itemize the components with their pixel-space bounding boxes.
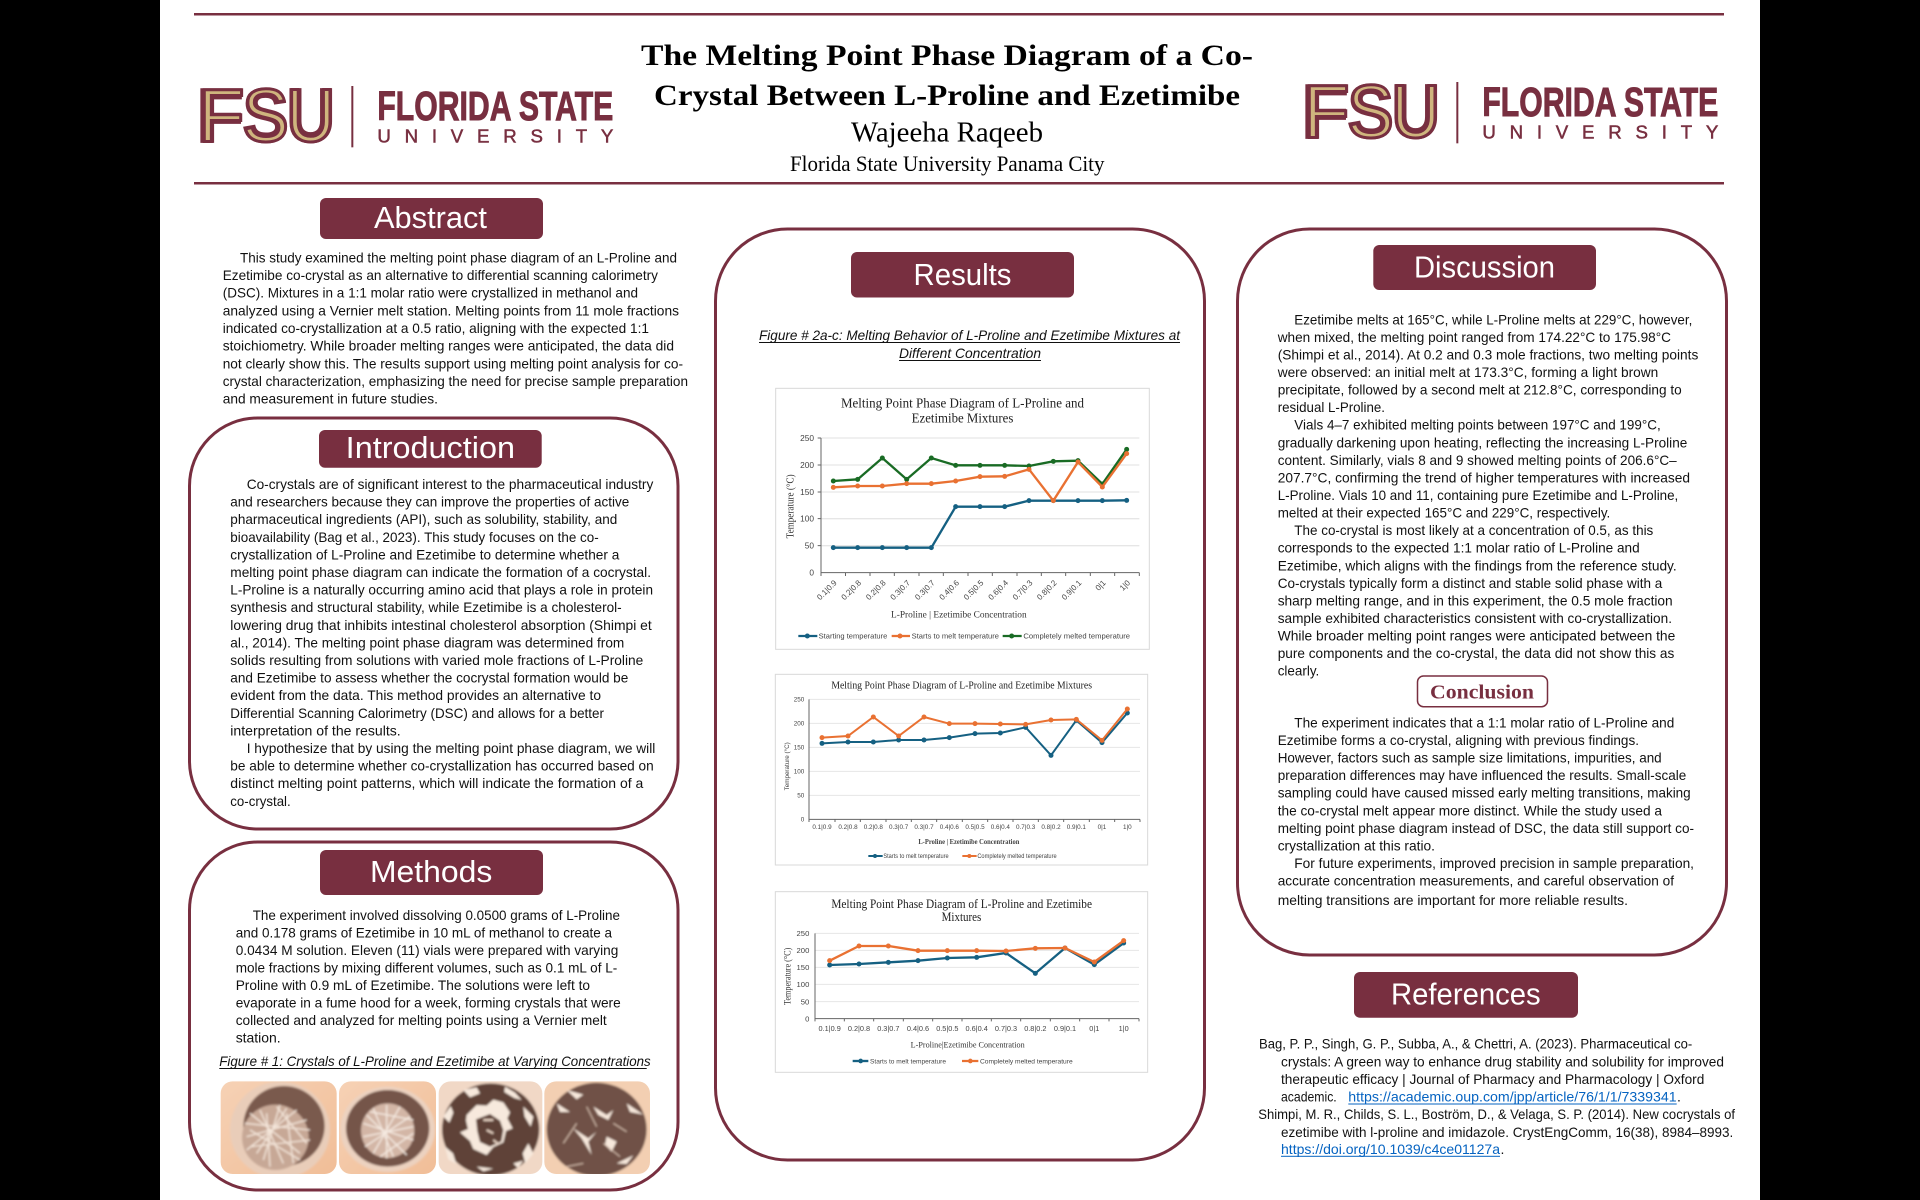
legend: Completely melted temperature — [977, 854, 1057, 860]
text: discussion body: Co-crystals typically form a distinct and stable solid phase with a — [1278, 575, 1662, 591]
text: introduction body: and Ezetimibe to assess whether the cocrystal formation would be — [230, 670, 628, 686]
text: discussion body: While broader melting point ranges were anticipated between the — [1278, 628, 1675, 644]
text: references list: Bag, P. P., Singh, G. P., Subba, A., & Chettri, A. (2023). Pharmaceutical co- — [1259, 1036, 1693, 1052]
text: discussion body: The co-crystal is most likely at a concentration of 0.5, as this — [1294, 522, 1653, 538]
logo: FSU Florida State University, right: FLORIDA STATE — [1482, 79, 1718, 125]
logo: FSU Florida State University, right: S — [1348, 70, 1394, 154]
text: conclusion body: accurate concentration measurements, and careful observation of — [1278, 873, 1674, 889]
x axis labels: 1|0 — [1119, 1024, 1129, 1033]
text: references list: academic. — [1281, 1089, 1337, 1105]
x axis labels: 0.3|0.7 — [913, 578, 937, 602]
heading: Conclusion — [1418, 676, 1548, 707]
legend: Starts to melt temperature — [870, 1058, 946, 1065]
x axis labels: 0.3|0.7 — [889, 824, 909, 831]
series: starting temperature — [833, 500, 1127, 548]
text: methods body: mole fractions by mixing different volumes, such as 0.1 mL of L- — [236, 960, 618, 976]
x axis labels: 0.3|0.7 — [914, 824, 934, 831]
text: introduction body: bioavailability (Bag et al., 2023). This study focuses on the co- — [230, 529, 599, 545]
x axis title: L-Proline | Ezetimibe Concentration — [918, 837, 1020, 846]
text: conclusion body: However, factors such as sample size limitations, impurities, and — [1278, 750, 1662, 766]
y axis title: Temperature (°C) — [785, 474, 796, 538]
text: abstract body — [223, 250, 688, 407]
x axis labels: 0.4|0.6 — [940, 824, 959, 831]
x axis labels: 0.4|0.6 — [938, 578, 961, 602]
black side margin: right — [1760, 0, 1920, 1200]
author name: Wajeeha Raqeeb — [851, 117, 1043, 149]
logo: FSU Florida State University, right: F — [1302, 70, 1348, 154]
x axis labels: 0.1|0.9 — [819, 1024, 841, 1033]
text: abstract body: crystal characterization, emphasizing the need for precise sample preparation — [223, 373, 688, 389]
text: discussion body: melted at their expected 165°C and 229°C, respectively. — [1278, 505, 1610, 521]
series: starts to melt temperature — [833, 454, 1127, 501]
x axis labels: 0.7|0.3 — [1016, 824, 1036, 831]
black side margin: left — [0, 0, 160, 1200]
chart title: Ezetimibe Mixtures — [912, 411, 1013, 426]
heading: Conclusion: Conclusion — [1430, 681, 1534, 703]
text: methods body: collected and analyzed for melting points using a Vernier melt — [236, 1012, 607, 1028]
logo: FSU Florida State University, right: U — [1392, 70, 1440, 154]
y axis labels: 200 — [797, 946, 809, 955]
y axis labels: 100 — [797, 980, 809, 989]
text: introduction body: evident from the data. This method provides an alternative to — [230, 687, 601, 703]
legend — [868, 854, 1057, 860]
heading: Discussion: Discussion — [1414, 250, 1555, 285]
text: discussion body: precipitate, followed by a second melt at 212.8°C, corresponding to — [1278, 382, 1682, 398]
y axis labels: 0 — [801, 817, 805, 824]
series: completely melted temperature — [833, 449, 1127, 484]
x axis labels — [819, 1024, 1129, 1033]
text: introduction body — [230, 476, 655, 809]
chart title: Mixtures — [942, 910, 982, 924]
text: abstract body: analyzed using a Vernier melt station. Melting points from 11 mole fractions — [223, 302, 679, 318]
logo: FSU Florida State University, left: U — [287, 74, 335, 158]
text: methods body — [236, 907, 621, 1046]
panel: Introduction — [190, 418, 678, 829]
text: references list: https://doi.org/10.1039/c4ce01127a — [1281, 1141, 1500, 1157]
logo: FSU Florida State University, right — [1302, 70, 1719, 154]
text: introduction body: L-Proline is a naturally occurring amino acid that plays a role in protein — [230, 582, 653, 598]
heading: Discussion — [1373, 245, 1596, 290]
logo: FSU Florida State University, left: S — [243, 74, 289, 158]
text: discussion body: gradually darkening upon heating, reflecting the increasing L-Proline — [1278, 434, 1688, 450]
x axis labels: 0|1 — [1098, 824, 1107, 831]
text: references list: . — [1677, 1089, 1681, 1105]
text: conclusion body: sampling could have caused missed early melting transitions, making — [1278, 785, 1691, 801]
figure 2 caption: Figure # 2a-c: Melting Behavior of L-Proline and Ezetimibe Mixtures at — [759, 327, 1181, 343]
photo: crystal vial 3 — [438, 1081, 542, 1174]
logo: FSU Florida State University, left: UNIVERSITY — [377, 126, 614, 147]
text: methods body: evaporate in a fume hood for a week, forming crystals that were — [236, 995, 621, 1011]
y axis labels: 100 — [800, 514, 814, 524]
y axis labels: 250 — [794, 697, 805, 704]
y axis labels: 50 — [797, 793, 805, 800]
x axis labels — [815, 578, 1132, 602]
logo: FSU Florida State University, left: F — [197, 74, 243, 158]
text: discussion body — [1277, 311, 1698, 679]
text: discussion body: Vials 4–7 exhibited melting points between 197°C and 199°C, — [1294, 417, 1661, 433]
series: completely melted temperature — [830, 941, 1124, 962]
logo: FSU Florida State University, left: S — [243, 74, 289, 158]
text: introduction body: synthesis and structural stability, while Ezetimibe is a cholesterol- — [230, 599, 622, 615]
y axis labels: 0 — [805, 1014, 809, 1023]
text: references list: ezetimibe with l-proline and imidazole. CrystEngComm, 16(38), 8984–8993. — [1281, 1124, 1733, 1140]
poster title — [641, 39, 1253, 112]
logo: FSU Florida State University, left: FLORIDA STATE — [377, 83, 613, 129]
x axis labels: 0.2|0.8 — [864, 578, 888, 602]
text: abstract body: and measurement in future studies. — [223, 391, 438, 407]
legend: Starts to melt temperature — [883, 854, 949, 860]
x axis labels: 0.6|0.4 — [966, 1024, 988, 1033]
text: conclusion body — [1278, 714, 1694, 908]
chart title: Melting Point Phase Diagram of L-Proline and Ezetimibe Mixtures — [831, 680, 1092, 691]
text: conclusion body: For future experiments, improved precision in sample preparation, — [1294, 855, 1694, 871]
text: discussion body: were observed: an initial melt at 173.3°C, forming a light brown — [1277, 364, 1658, 380]
x axis labels: 0.5|0.5 — [962, 578, 986, 602]
x axis labels: 0.2|0.8 — [848, 1024, 870, 1033]
photo: crystal vial 1 — [220, 1081, 337, 1174]
y axis labels — [800, 433, 814, 578]
x axis labels: 0.4|0.6 — [907, 1024, 929, 1033]
chart: two-series melting phase diagram (2c) — [775, 892, 1148, 1072]
text: methods body: station. — [236, 1030, 281, 1046]
y axis labels: 200 — [794, 721, 805, 728]
chart title — [841, 395, 1084, 426]
x axis labels: 0|1 — [1089, 1024, 1099, 1033]
x axis labels: 0.7|0.3 — [1011, 578, 1035, 602]
text: introduction body: distinct melting point patterns, which will indicate the formation of a — [230, 775, 644, 791]
text: introduction body: co-crystal. — [230, 793, 291, 809]
text: methods body: The experiment involved dissolving 0.0500 grams of L-Proline — [253, 907, 620, 923]
y axis labels: 0 — [809, 568, 814, 578]
text: references list: therapeutic efficacy | Journal of Pharmacy and Pharmacology | Oxford — [1281, 1071, 1704, 1087]
y axis labels — [797, 929, 809, 1023]
text: introduction body: solids resulting from solutions with varied mole fractions of L-Proline — [230, 652, 643, 668]
legend: Completely melted temperature — [980, 1058, 1073, 1065]
series: starts to melt temperature — [822, 713, 1127, 755]
text: abstract body: indicated co-crystallization at a 0.5 ratio, aligning with the expected 1:1 — [223, 320, 649, 336]
x axis labels: 0.8|0.2 — [1041, 824, 1061, 831]
chart: two-series melting phase diagram (2b) — [775, 674, 1148, 865]
y axis labels: 200 — [800, 460, 814, 470]
panel: Results — [716, 229, 1204, 1160]
x axis labels: 0.8|0.2 — [1024, 1024, 1046, 1033]
logo: FSU Florida State University, right: S — [1348, 70, 1394, 154]
legend: Completely melted temperature — [1023, 632, 1130, 641]
text: discussion body: content. Similarly, vials 8 and 9 showed melting points of 206.6°C– — [1278, 452, 1677, 468]
text: conclusion body: preparation differences may have influenced the results. Small-scale — [1278, 767, 1687, 783]
text: discussion body: Ezetimibe melts at 165°C, while L-Proline melts at 229°C, however, — [1294, 311, 1692, 327]
text: discussion body: sample exhibited characteristics consistent with co-crystallization. — [1278, 610, 1672, 626]
text: methods body: 0.0434 M solution. Eleven (11) vials were prepared with varying — [236, 942, 618, 958]
text: conclusion body: Ezetimibe forms a co-crystal, aligning with previous findings. — [1278, 732, 1639, 748]
y axis labels: 50 — [801, 997, 809, 1006]
y axis labels: 150 — [794, 745, 805, 752]
text: conclusion body: melting transitions are important for more reliable results. — [1278, 892, 1628, 908]
text: introduction body: crystallization of L-Proline and Ezetimibe to determine whether a — [230, 546, 620, 562]
logo: FSU Florida State University, right: F — [1303, 70, 1350, 154]
photo: crystal vial 2 — [339, 1081, 436, 1174]
text: introduction body: I hypothesize that by using the melting point phase diagram, we will — [247, 740, 655, 756]
heading: Introduction — [319, 430, 542, 468]
legend: Starts to melt temperature — [912, 632, 999, 641]
text: references list — [1258, 1036, 1735, 1157]
affiliation: Florida State University Panama City — [790, 151, 1104, 176]
text: introduction body: Co-crystals are of significant interest to the pharmaceutical industry — [247, 476, 653, 492]
logo: FSU Florida State University, left: U — [287, 74, 335, 158]
x axis labels: 0.2|0.8 — [864, 824, 883, 831]
x axis labels: 0.2|0.8 — [840, 578, 863, 602]
text: references list: https://academic.oup.com/jpp/article/76/1/1/7339341 — [1348, 1089, 1677, 1105]
x axis labels: 0.3|0.7 — [877, 1024, 899, 1033]
x axis labels: 0.6|0.4 — [987, 578, 1010, 602]
x axis labels: 0.9|0.1 — [1060, 578, 1084, 602]
x axis labels: 0.6|0.4 — [991, 824, 1010, 831]
text: abstract body: not clearly show this. The results support using melting point analysis for co- — [223, 355, 683, 371]
y axis labels — [794, 697, 805, 824]
x axis labels: 1|0 — [1123, 824, 1132, 831]
y axis labels: 100 — [794, 769, 805, 776]
y axis labels: 250 — [797, 929, 809, 938]
text: methods body: Proline with 0.9 mL of Ezetimibe. The solutions were left to — [236, 977, 590, 993]
text: discussion body: sharp melting range, and in this experiment, the 0.5 mole fraction — [1278, 592, 1673, 608]
logo: FSU Florida State University, left: F — [198, 74, 245, 158]
series: completely melted temperature — [822, 709, 1127, 740]
text: conclusion body: the co-crystal melt appear more distinct. While the study used a — [1278, 802, 1662, 818]
x axis labels: 0.1|0.9 — [812, 824, 832, 831]
text: discussion body: Ezetimibe, which aligns with the findings from the reference study. — [1278, 557, 1677, 573]
x axis title: L-Proline | Ezetimibe Concentration — [891, 609, 1027, 620]
x axis labels — [812, 824, 1132, 831]
chart title — [831, 897, 1092, 924]
text: discussion body: (Shimpi et al., 2014). At 0.2 and 0.3 mole fractions, two melting points — [1278, 346, 1698, 362]
heading: References: References — [1391, 976, 1541, 1011]
text: conclusion body: crystallization at this ratio. — [1278, 838, 1435, 854]
x axis labels: 0.7|0.3 — [995, 1024, 1017, 1033]
text: abstract body: (DSC). Mixtures in a 1:1 molar ratio were crystallized in methanol and — [223, 285, 638, 301]
text: introduction body: pharmaceutical ingredients (API), such as solubility, stability, and — [230, 511, 617, 527]
text: references list: . — [1500, 1141, 1504, 1157]
text: introduction body: lowering drug that inhibits intestinal cholesterol absorption (Shimpi et — [230, 617, 652, 633]
text: abstract body: This study examined the melting point phase diagram of an L-Proline and — [240, 250, 677, 266]
y axis labels: 250 — [800, 433, 814, 443]
text: methods body: and 0.178 grams of Ezetimibe in 10 mL of methanol to create a — [236, 924, 612, 940]
logo: FSU Florida State University, left — [197, 74, 614, 158]
heading: Results — [851, 252, 1074, 298]
text: conclusion body: The experiment indicates that a 1:1 molar ratio of L-Proline and — [1294, 714, 1674, 730]
poster title: The Melting Point Phase Diagram of a Co- — [641, 39, 1253, 72]
x axis labels: 0.5|0.5 — [936, 1024, 958, 1033]
y axis title: Temperature (°C) — [783, 948, 794, 1005]
text: conclusion body: melting point phase diagram instead of DSC, the data still support co- — [1278, 820, 1694, 836]
text: discussion body: corresponds to the expected 1:1 molar ratio of L-Proline and — [1278, 540, 1640, 556]
text: introduction body: Differential Scanning Calorimetry (DSC) and allows for a better — [230, 705, 604, 721]
text: references list: crystals: A green way to enhance drug stability and solubility for improved — [1281, 1053, 1724, 1069]
y axis labels: 50 — [805, 541, 814, 551]
heading: Methods — [320, 850, 543, 895]
text: introduction body: be able to determine whether co-crystallization has occurred based on — [230, 758, 654, 774]
panel: Discussion and Conclusion — [1238, 229, 1726, 955]
figure 2 caption: Different Concentration — [899, 345, 1041, 361]
x axis title: L-Proline|Ezetimibe Concentration — [911, 1040, 1025, 1049]
figure 1: crystal photographs — [217, 1078, 653, 1178]
logo: FSU Florida State University, right: UNIVERSITY — [1482, 122, 1719, 143]
panel: Methods — [190, 842, 678, 1190]
x axis labels: 1|0 — [1118, 578, 1132, 593]
text: introduction body: al., 2014). The melting point phase diagram was determined from — [230, 634, 624, 650]
text: references list: Shimpi, M. R., Childs, S. L., Boström, D., & Velaga, S. P. (2014). New cocrystals of — [1258, 1106, 1735, 1122]
text: discussion body: 207.7°C, confirming the trend of higher temperatures with increased — [1278, 469, 1690, 485]
text: abstract body: stoichiometry. While broader melting ranges were anticipated, the data did — [223, 338, 674, 354]
text: introduction body: interpretation of the results. — [230, 722, 401, 738]
chart: three-series melting phase diagram (2a) — [776, 388, 1149, 649]
series: starts to melt temperature — [830, 943, 1124, 973]
chart title: Melting Point Phase Diagram of L-Proline and — [841, 395, 1084, 410]
legend: Starting temperature — [819, 632, 887, 641]
figure 1 caption: Figure # 1: Crystals of L-Proline and Ezetimibe at Varying Concentrations — [219, 1053, 651, 1069]
logo: FSU Florida State University, right: U — [1392, 70, 1440, 154]
x axis labels: 0.3|0.7 — [889, 578, 912, 602]
heading: Abstract: Abstract — [374, 200, 487, 235]
text: introduction body: melting point phase diagram can indicate the formation of a cocrystal. — [230, 564, 651, 580]
x axis labels: 0|1 — [1094, 578, 1108, 593]
heading: Introduction: Introduction — [346, 430, 515, 465]
x axis labels: 0.9|0.1 — [1067, 824, 1086, 831]
text: discussion body: L-Proline. Vials 10 and 11, containing pure Ezetimibe and L-Proline, — [1278, 487, 1678, 503]
text: discussion body: when mixed, the melting point ranged from 174.22°C to 175.98°C — [1277, 329, 1671, 345]
heading: References — [1354, 972, 1578, 1018]
text: discussion body: pure components and the co-crystal, the data did not show this as — [1278, 645, 1674, 661]
x axis labels: 0.9|0.1 — [1054, 1024, 1076, 1033]
photo: crystal vial 4 — [544, 1081, 650, 1174]
heading: Methods: Methods — [370, 854, 492, 889]
legend — [853, 1058, 1073, 1065]
y axis labels: 150 — [797, 963, 809, 972]
x axis labels: 0.2|0.8 — [838, 824, 858, 831]
y axis title: Temperature (°C) — [783, 742, 791, 790]
text: discussion body: residual L-Proline. — [1278, 399, 1385, 415]
x axis labels: 0.5|0.5 — [965, 824, 985, 831]
heading: Results: Results — [914, 257, 1012, 292]
legend — [798, 632, 1130, 641]
x axis labels: 0.8|0.2 — [1035, 578, 1059, 602]
figure 2 caption — [759, 327, 1181, 361]
text: introduction body: and researchers because they can improve the properties of active — [230, 494, 629, 510]
heading: Abstract — [320, 198, 543, 239]
poster title: Crystal Between L-Proline and Ezetimibe — [654, 79, 1240, 112]
chart title: Melting Point Phase Diagram of L-Proline and Ezetimibe — [831, 897, 1092, 911]
text: abstract body: Ezetimibe co-crystal as an alternative to differential scanning calorimetry — [223, 267, 658, 283]
x axis labels: 0.1|0.9 — [815, 578, 839, 602]
y axis labels: 150 — [800, 487, 814, 497]
text: discussion body: clearly. — [1278, 663, 1319, 679]
